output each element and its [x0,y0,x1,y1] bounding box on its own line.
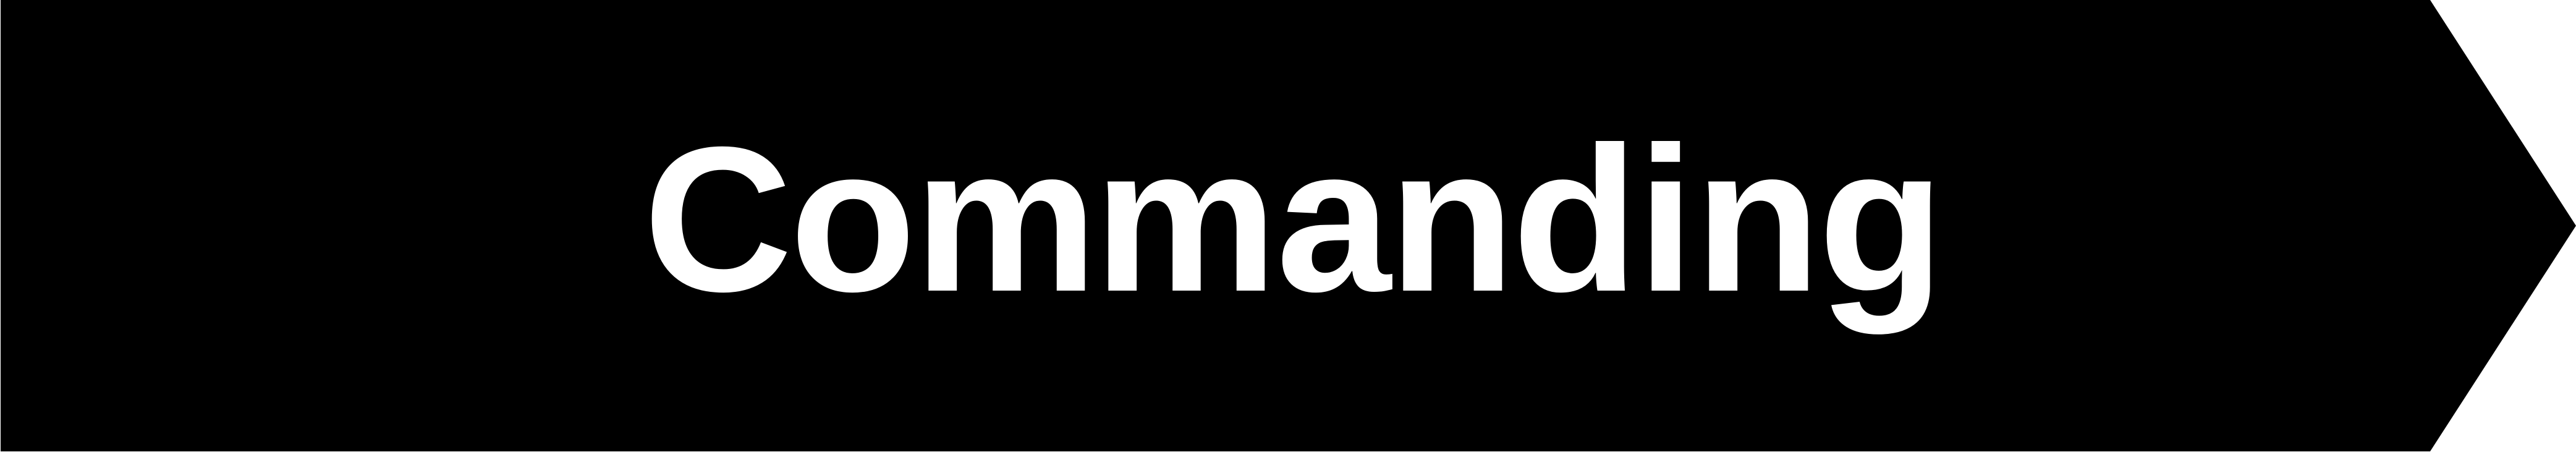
title: Commanding: Commanding [643,104,1944,336]
